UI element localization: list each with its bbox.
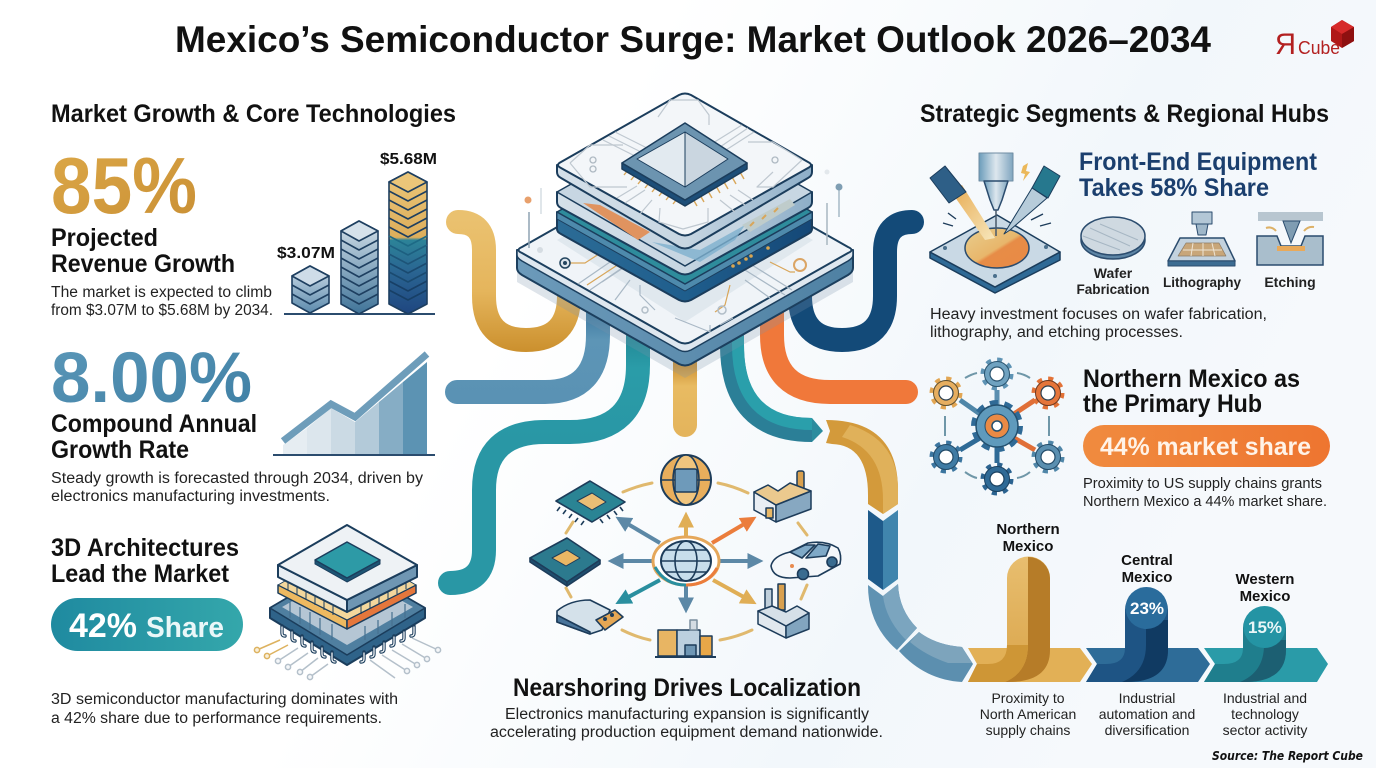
label: central mexico region: Central	[1121, 552, 1173, 569]
gear bottom-right	[1034, 443, 1062, 471]
dashed ring	[566, 483, 807, 640]
chip body	[622, 123, 747, 206]
pillars on base	[524, 170, 842, 248]
heading: 3D architectures	[51, 534, 239, 588]
heading: northern mexico: the Primary Hub	[1083, 390, 1262, 418]
northern pillar shade	[1005, 557, 1050, 682]
text: front-end description: Heavy investment focuses on wafer fabrication,	[930, 306, 1267, 323]
text: western region detail: Industrial and	[1223, 690, 1307, 706]
heading: 3D architectures: Lead the Market	[51, 560, 230, 588]
bolts	[943, 245, 1048, 278]
ribbon: gold center	[673, 350, 697, 425]
text: northern region detail: Proximity to	[991, 690, 1065, 706]
flow path: segmented arrow to regional hubs	[826, 420, 973, 682]
gear bottom	[983, 465, 1011, 493]
chart: growth area	[273, 354, 435, 455]
central cap	[1126, 587, 1168, 629]
central pillar	[1086, 588, 1168, 682]
ribbon: navy right U	[800, 222, 912, 340]
heading: CAGR: Growth Rate	[51, 436, 189, 464]
text: northern region detail: supply chains	[986, 722, 1070, 738]
stat: 85%: 85%	[51, 141, 197, 230]
label: central mexico region	[1121, 552, 1173, 586]
pill: 44% market share	[1083, 425, 1330, 467]
heading: northern mexico: Northern Mexico as	[1083, 365, 1300, 393]
center nozzle	[979, 153, 1013, 181]
central value: 23%	[1130, 599, 1164, 618]
text: 3D description: 3D semiconductor manufacturing dominates with	[51, 691, 398, 708]
central bar	[1086, 648, 1210, 682]
text: central region detail: diversification	[1105, 722, 1189, 738]
network: nearshoring	[530, 455, 841, 657]
ribbon: orange right	[772, 300, 906, 392]
heading: CAGR	[51, 410, 257, 464]
text: northern region detail	[980, 690, 1076, 738]
laser beam	[950, 185, 995, 240]
label: wafer fabrication	[1076, 265, 1150, 297]
text: 3D description: a 42% share due to performance requirements.	[51, 710, 382, 727]
heading: northern mexico	[1083, 365, 1300, 418]
heading: projected revenue growth: Projected	[51, 224, 158, 252]
dashed links	[945, 373, 1049, 478]
center gear	[974, 403, 1020, 449]
heading: 3D architectures: 3D Architectures	[51, 534, 239, 562]
label: etching: Etching	[1264, 274, 1316, 290]
left tool	[930, 166, 966, 203]
chip pins	[624, 170, 744, 206]
chart: stacked revenue bars	[277, 151, 437, 314]
logo: RCube: Cube	[1298, 38, 1340, 58]
gear top	[983, 360, 1011, 388]
heading: front-end	[1079, 148, 1318, 202]
ribbon: gold left U	[458, 222, 569, 340]
western bar	[1204, 648, 1328, 682]
icon: wafer	[1081, 217, 1145, 259]
label: western mexico region	[1236, 571, 1294, 605]
heading: CAGR: Compound Annual	[51, 410, 257, 438]
section heading: right: Strategic Segments & Regional Hubs	[920, 100, 1329, 128]
text: front-end description: lithography, and etching processes.	[930, 324, 1183, 341]
pill: 44% market share: 44% market share	[1100, 433, 1311, 461]
label: western mexico region: Western	[1236, 571, 1294, 588]
text: northern region detail: North American	[980, 706, 1076, 722]
icon: 3D stacked chip	[254, 525, 441, 680]
stack tall	[389, 172, 427, 314]
text: western region detail	[1223, 690, 1307, 738]
leg highlights	[282, 627, 414, 662]
label: 5.68: $5.68M	[380, 151, 437, 168]
ribbon: teal to 3D architectures	[450, 315, 638, 583]
text: central region detail: Industrial	[1119, 690, 1175, 706]
text: northern description	[1083, 476, 1327, 510]
stat: 8.00%: 8.00%	[51, 339, 252, 418]
shadow under central chip	[517, 270, 853, 378]
icon: car	[771, 542, 841, 580]
northern bar	[968, 648, 1092, 682]
pill: 42% share: Share	[146, 612, 224, 644]
label: northern mexico region: Northern	[996, 521, 1060, 538]
icon: USB storage	[557, 600, 623, 634]
icon: factory bottom right	[758, 584, 809, 638]
label: wafer fabrication: Fabrication	[1076, 281, 1150, 297]
text: northern description: Northern Mexico a 44% market share.	[1083, 494, 1327, 510]
heading: front-end: Takes 58% Share	[1079, 174, 1269, 202]
text: central region detail: automation and	[1099, 706, 1195, 722]
pill: 42% share	[51, 598, 243, 651]
baseline	[284, 313, 435, 315]
connectors	[290, 602, 405, 640]
spokes	[960, 390, 1035, 463]
platform	[930, 252, 1060, 293]
text: central region detail	[1099, 690, 1195, 738]
stack small	[292, 266, 329, 313]
text: nearshoring description: accelerating production equipment demand nationwide.	[490, 724, 883, 741]
central pillar shade	[1122, 620, 1168, 682]
right tool	[1032, 166, 1060, 198]
text: front-end description	[930, 306, 1267, 341]
gold layer	[278, 585, 347, 629]
central stacked chip	[517, 94, 853, 366]
sparks	[943, 213, 1051, 226]
center globe	[653, 537, 719, 585]
text: revenue description: The market is expected to climb	[51, 284, 272, 301]
base plate	[517, 156, 853, 366]
label: northern mexico region: Mexico	[1003, 538, 1053, 555]
wafer	[965, 228, 1029, 268]
section heading: left: Market Growth & Core Technologies	[51, 100, 456, 128]
die	[315, 560, 380, 582]
layer two	[557, 120, 812, 274]
western pillar shade	[1240, 640, 1286, 682]
stack medium	[341, 221, 378, 314]
heading: projected revenue growth: Revenue Growth	[51, 250, 235, 278]
base	[270, 563, 425, 665]
heading: front-end: Front-End Equipment	[1079, 148, 1318, 176]
legs	[282, 626, 414, 662]
heading: projected revenue growth	[51, 224, 235, 278]
label: lithography: Lithography	[1163, 274, 1241, 290]
comb	[288, 581, 406, 615]
icon: etching	[1257, 212, 1323, 265]
text: western region detail: sector activity	[1223, 722, 1307, 738]
layer three	[557, 140, 812, 302]
icon: top globe chip	[661, 455, 711, 505]
label: central mexico region: Mexico	[1122, 569, 1172, 586]
text: nearshoring description: Electronics manufacturing expansion is significantly	[505, 706, 869, 723]
ribbon: teal right	[732, 315, 823, 442]
icon: lithography	[1168, 212, 1235, 266]
text: 3D description	[51, 691, 398, 727]
western pillar	[1204, 606, 1286, 682]
gear bottom-left	[932, 443, 960, 471]
top plate	[278, 565, 347, 612]
label: western mexico region: Mexico	[1240, 588, 1290, 605]
icon: front-end equipment tool	[930, 153, 1060, 293]
western value: 15%	[1248, 618, 1282, 637]
title: Mexico’s Semiconductor Surge: Market Outlook 2026–2034	[175, 19, 1211, 60]
text: CAGR description: electronics manufacturing investments.	[51, 488, 330, 505]
ribbon: steel blue left	[457, 295, 598, 392]
label: 3.07: $3.07M	[277, 245, 335, 262]
logo: RCube	[1275, 20, 1354, 61]
text: northern description: Proximity to US supply chains grants	[1083, 476, 1322, 492]
hub bars and pillars	[968, 556, 1328, 682]
text: CAGR description	[51, 470, 423, 505]
logo: RCube: Я	[1275, 28, 1296, 61]
western cap	[1244, 606, 1286, 648]
top plate	[557, 94, 812, 248]
text: revenue description	[51, 284, 273, 319]
label: northern mexico region	[996, 521, 1060, 555]
text: CAGR description: Steady growth is forecasted through 2034, driven by	[51, 470, 423, 487]
northern pillar lower	[968, 645, 1028, 682]
northern pillar	[968, 556, 1050, 682]
icon: chip top left	[556, 481, 625, 525]
gear top-right	[1034, 379, 1062, 407]
icon: circuit board	[530, 538, 600, 586]
gear top-left	[932, 379, 960, 407]
icon: gear network	[932, 360, 1062, 493]
source: Source: The Report Cube	[1212, 749, 1363, 763]
icon: factory bottom	[655, 620, 716, 657]
icon: factory top right	[754, 471, 811, 522]
pill: 42% share: 42%	[69, 607, 137, 645]
text: nearshoring description	[490, 706, 883, 741]
text: western region detail: technology	[1231, 706, 1299, 722]
label: wafer fabrication: Wafer	[1094, 265, 1133, 281]
heading: nearshoring: Nearshoring Drives Localization	[513, 674, 861, 702]
arrows	[614, 518, 757, 607]
text: revenue description: from $3.07M to $5.68M by 2034.	[51, 302, 273, 319]
